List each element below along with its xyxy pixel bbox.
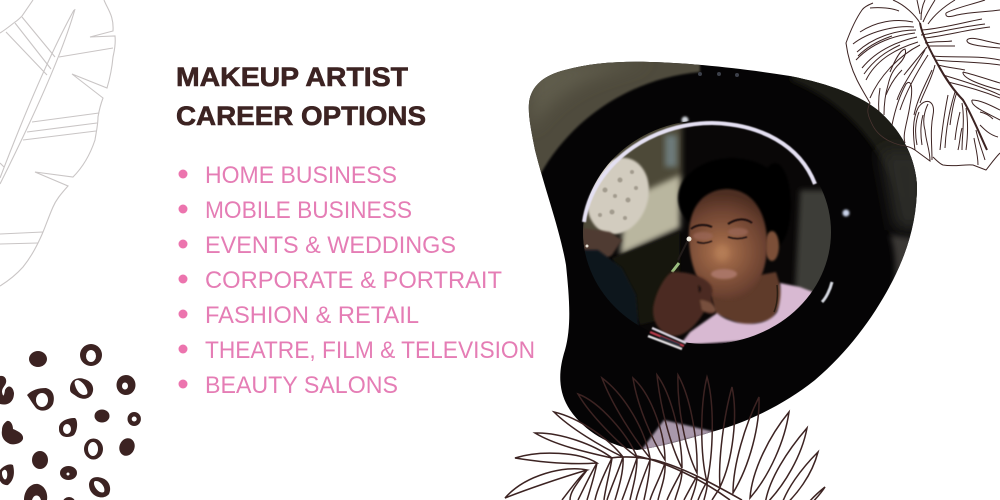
artist hair [588, 156, 650, 236]
ear [765, 231, 779, 261]
bracelet [648, 328, 686, 349]
list items: EVENTS & WEDDINGS [205, 232, 456, 259]
necklace [774, 285, 777, 312]
decorative dots pattern, bottom left [0, 344, 141, 500]
list items: BEAUTY SALONS [205, 372, 398, 399]
shirt reflection at bottom [640, 420, 715, 452]
title [176, 62, 426, 131]
decorative monstera leaf, top right [846, 0, 1000, 170]
nose [716, 247, 728, 260]
list items [205, 162, 535, 399]
face [689, 189, 767, 300]
bullet list markers [178, 170, 188, 388]
model hair [676, 160, 765, 220]
title: MAKEUP ARTIST [176, 62, 409, 92]
mirror scene [583, 121, 831, 344]
model neck [708, 272, 784, 326]
list items: CORPORATE & PORTRAIT [205, 267, 502, 294]
makeup brush [678, 240, 688, 260]
decorative banana leaf outline, top left [0, 0, 115, 286]
foreground dark panel [694, 339, 742, 344]
list items: FASHION & RETAIL [205, 302, 419, 329]
brows and eyes [691, 219, 752, 229]
list items: MOBILE BUSINESS [205, 197, 412, 224]
artist face [583, 228, 622, 258]
faint monstera outline over the photo [868, 104, 906, 147]
decorative palm frond, bottom [505, 375, 825, 500]
hand [653, 272, 716, 336]
list: career options [178, 162, 535, 399]
lips [711, 269, 737, 279]
list items: THEATRE, FILM & TELEVISION [205, 337, 535, 364]
ring light [584, 123, 832, 302]
shirt [680, 283, 824, 345]
artist jacket [584, 248, 638, 325]
photo: makeup artist applying makeup, seen through ring light, in organic blob [528, 62, 917, 450]
title: CAREER OPTIONS [176, 101, 426, 131]
list items: HOME BUSINESS [205, 162, 397, 189]
